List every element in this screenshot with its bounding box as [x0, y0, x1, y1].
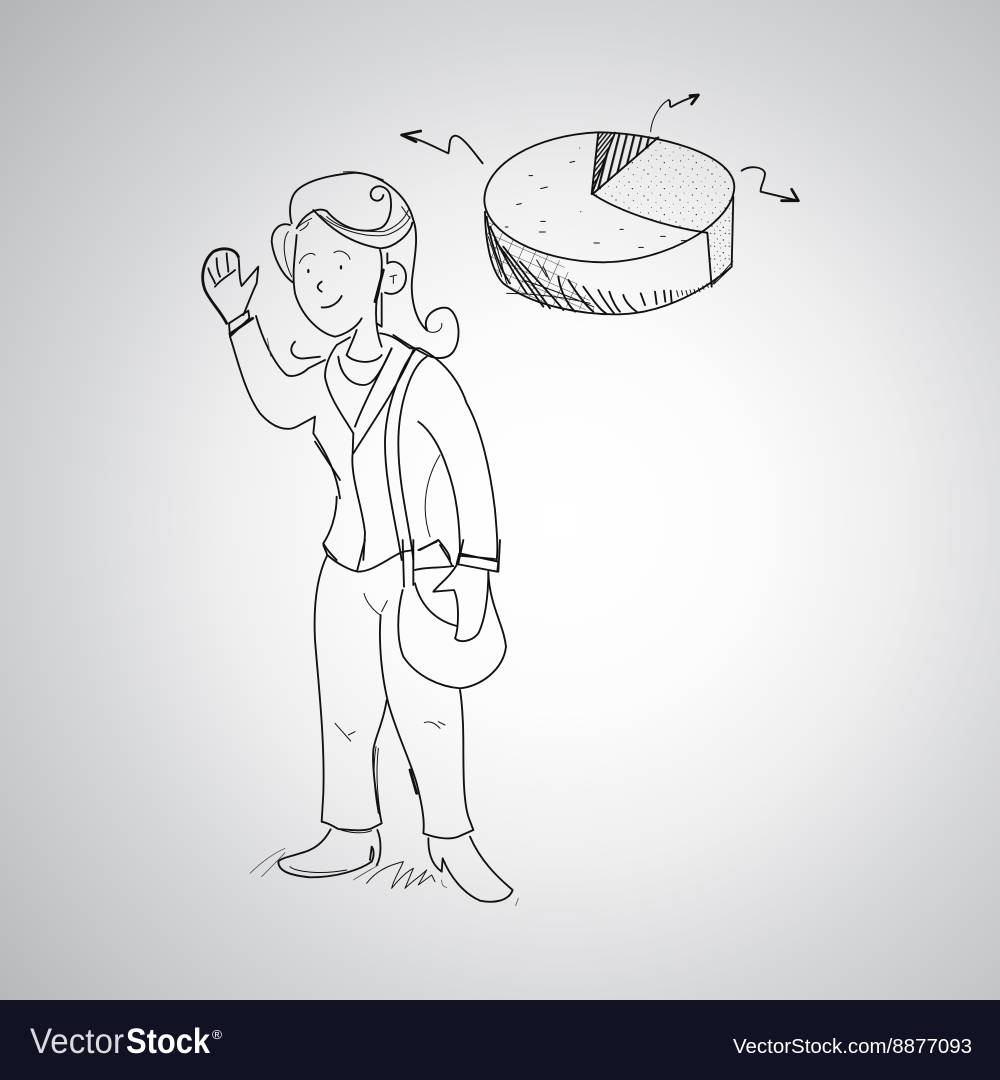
- bag strap: [385, 350, 427, 560]
- footer logo: Stock: [126, 1022, 210, 1061]
- pie side wall: [485, 197, 733, 314]
- jacket hem and sleeve cuff: [323, 540, 500, 587]
- lower body: [250, 540, 518, 906]
- light slice flecks: [505, 147, 686, 247]
- footer bar: [0, 1000, 1000, 1080]
- right shoe: [428, 837, 513, 902]
- footer logo: [30, 1022, 222, 1061]
- ear: [375, 253, 406, 302]
- neck and sweater: [338, 300, 392, 385]
- raised arm: [230, 316, 325, 429]
- raised hand: [203, 249, 258, 337]
- tucked hand: [433, 565, 488, 641]
- trousers: [315, 555, 473, 838]
- footer logo: Vector: [30, 1022, 124, 1061]
- arrow right: [742, 167, 798, 201]
- pie chart sketch: [402, 95, 798, 314]
- grass: [250, 848, 518, 906]
- arrow top: [651, 95, 698, 132]
- jacket: [313, 333, 497, 560]
- hatched slice: [592, 133, 658, 194]
- dotted slice: [593, 137, 734, 233]
- face: [294, 235, 382, 337]
- head and upper body: [203, 172, 497, 560]
- hair: [272, 172, 459, 358]
- footer logo: ®: [212, 1027, 222, 1042]
- side wall hatching: [483, 210, 708, 313]
- footer url: VectorStock.com/8877093: [733, 1036, 972, 1058]
- left shoe: [278, 829, 381, 877]
- arrow left: [402, 131, 483, 163]
- shoulder bag: [398, 566, 506, 688]
- pie top ellipse: [484, 132, 734, 262]
- woman figure: [203, 172, 518, 906]
